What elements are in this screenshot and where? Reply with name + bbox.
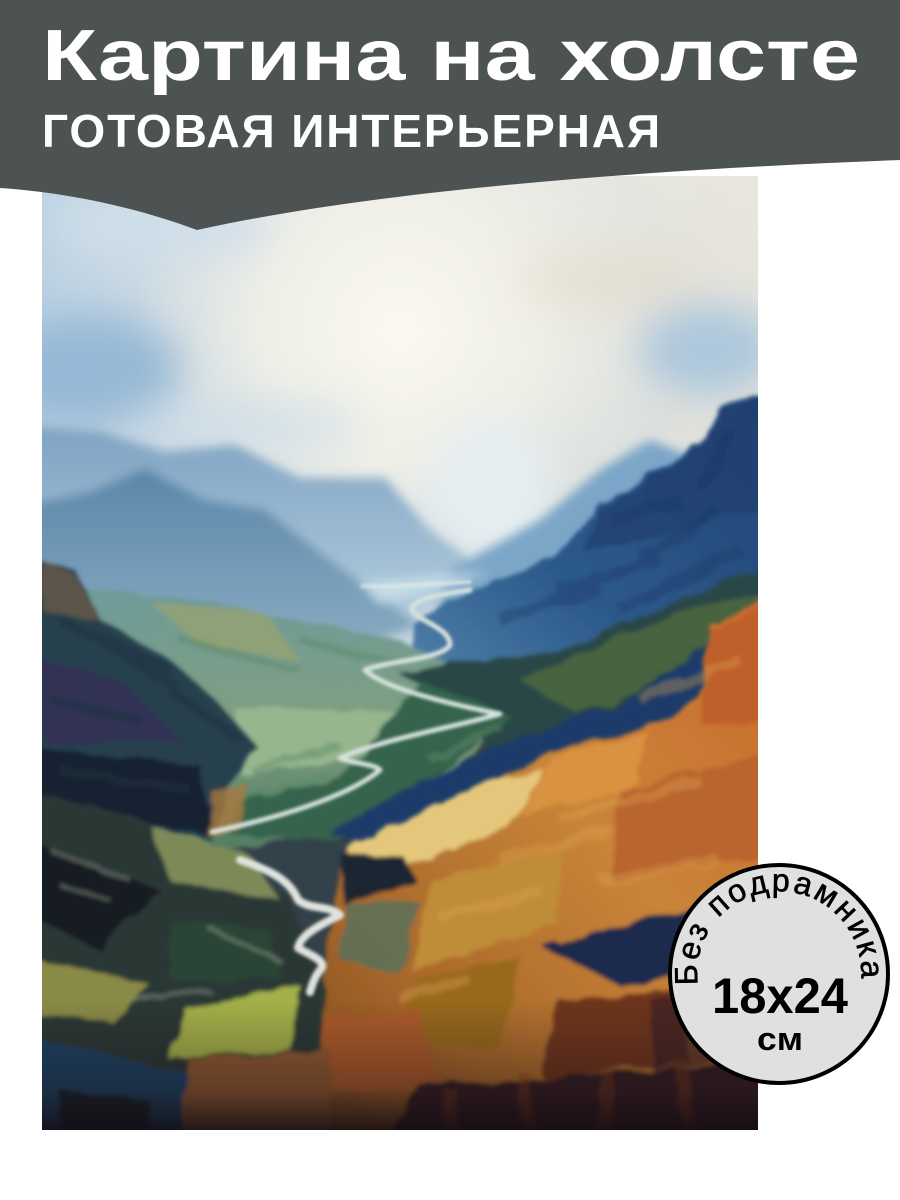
valley floor [84,568,758,850]
base ground under the lower half [228,738,490,985]
orange hill [317,597,758,1130]
lower left foreground [42,794,332,1130]
size value: 18x24 [712,968,848,1024]
left dark hills [42,558,260,843]
painting: mountain valley landscape [42,176,758,1130]
header banner [0,0,900,230]
sky [42,176,758,648]
subtitle: ГОТОВАЯ ИНТЕРЬЕРНАЯ [42,105,660,157]
badge: size without stretcher [668,863,890,1085]
curved label: Без подрамника [674,874,879,984]
shadow at the bottom of the canvas [42,1000,758,1130]
unit: см [757,1021,803,1057]
far and middle mountains [42,423,688,638]
title: Картина на холсте [42,16,860,96]
dark blue ridge above orange hill [330,644,708,841]
river [212,582,500,992]
right blue mountain [410,392,758,665]
